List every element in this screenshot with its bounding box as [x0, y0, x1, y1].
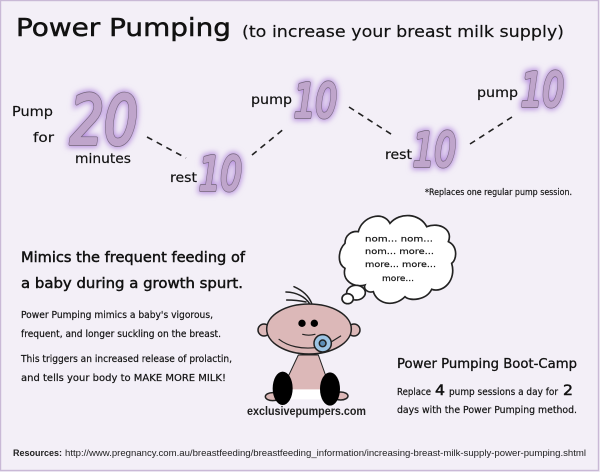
- boot-camp section: Power Pumping Boot-Camp: [397, 357, 577, 372]
- step: second rest 10: [385, 123, 456, 177]
- boot-camp section: days with the Power Pumping method.: [397, 405, 577, 416]
- step: second pump 10: pump: [477, 86, 518, 101]
- step: second pump 10: 10: [521, 63, 564, 117]
- baby illustration: [258, 287, 360, 406]
- step: rest 10: [170, 147, 242, 201]
- step: rest 10: 10: [199, 147, 242, 201]
- pacifier: [314, 335, 331, 352]
- heading: mimics: Mimics the frequent feeding of: [21, 250, 246, 266]
- thought bubble: more...: [382, 274, 414, 283]
- step: pump for 20 minutes: for: [33, 131, 55, 146]
- body: [287, 355, 327, 390]
- step: pump 10: 10: [294, 74, 337, 128]
- step: pump for 20 minutes: 20: [70, 82, 138, 161]
- boot-camp section: 2: [563, 383, 573, 399]
- step: rest 10: 10: [199, 147, 242, 201]
- heading: mimics: [21, 250, 246, 292]
- thought bubble: more... more...: [365, 260, 436, 269]
- title: [16, 13, 564, 42]
- resources line: Resources:: [13, 448, 62, 459]
- thought bubble: [339, 216, 456, 304]
- step: pump for 20 minutes: 20: [70, 82, 138, 161]
- text block: explanation: [20, 310, 232, 384]
- arrow: dashed line to pump: [252, 128, 285, 155]
- step: rest 10: 10: [199, 147, 242, 201]
- step: second rest 10: 10: [413, 123, 456, 177]
- step: second pump 10: 10: [521, 63, 564, 117]
- arrow: dashed line to second pump: [470, 117, 512, 144]
- nose and mouth: [279, 334, 341, 348]
- hair: [286, 287, 312, 303]
- text block: explanation: Power Pumping mimics a baby's vigorous,: [21, 310, 213, 321]
- step: pump for 20 minutes: minutes: [75, 152, 131, 167]
- thought bubble: nom... nom...: [365, 234, 433, 244]
- step: second rest 10: rest: [385, 148, 412, 163]
- title: (to increase your breast milk supply): [242, 22, 564, 41]
- resources line: http://www.pregnancy.com.au/breastfeeding/breastfeeding_information/increasing-breast-milk-supply-power-pumping.shtml: [65, 448, 586, 459]
- head: [267, 304, 351, 354]
- website label: exclusivepumpers.com: [247, 404, 366, 418]
- footnote: *Replaces one regular pump session.: [425, 188, 572, 198]
- feet: [265, 392, 348, 401]
- boot-camp section: Replace: [397, 387, 431, 398]
- text block: explanation: and tells your body to MAKE MORE MILK!: [21, 373, 226, 384]
- step: rest 10: rest: [170, 171, 197, 186]
- boot-camp section: [397, 357, 577, 416]
- step: second pump 10: [477, 63, 564, 117]
- boot-camp section: 4: [435, 383, 445, 399]
- thought bubble: nom... more...: [365, 247, 434, 256]
- arrow: dashed line to second rest: [349, 107, 394, 136]
- diaper: [290, 389, 323, 399]
- text block: explanation: frequent, and longer suckling on the breast.: [21, 329, 221, 340]
- step: pump 10: 10: [294, 74, 337, 128]
- legs: [273, 372, 340, 406]
- step: pump 10: [251, 74, 337, 128]
- step: pump 10: 10: [294, 74, 337, 128]
- arrow: dashed line to rest: [147, 137, 186, 158]
- step: pump for 20 minutes: [12, 82, 138, 167]
- step: second rest 10: 10: [413, 123, 456, 177]
- step: pump for 20 minutes: Pump: [12, 105, 53, 120]
- ears: [258, 324, 360, 336]
- title: Power Pumping: [16, 13, 231, 42]
- eyes: [298, 320, 318, 327]
- step: second pump 10: 10: [521, 63, 564, 117]
- heading: mimics: a baby during a growth spurt.: [21, 276, 243, 292]
- boot-camp section: pump sessions a day for: [449, 387, 558, 398]
- step: second rest 10: 10: [413, 123, 456, 177]
- step: pump for 20 minutes: 20: [70, 82, 138, 161]
- text block: explanation: This triggers an increased release of prolactin,: [20, 354, 232, 365]
- step: pump 10: pump: [251, 93, 292, 108]
